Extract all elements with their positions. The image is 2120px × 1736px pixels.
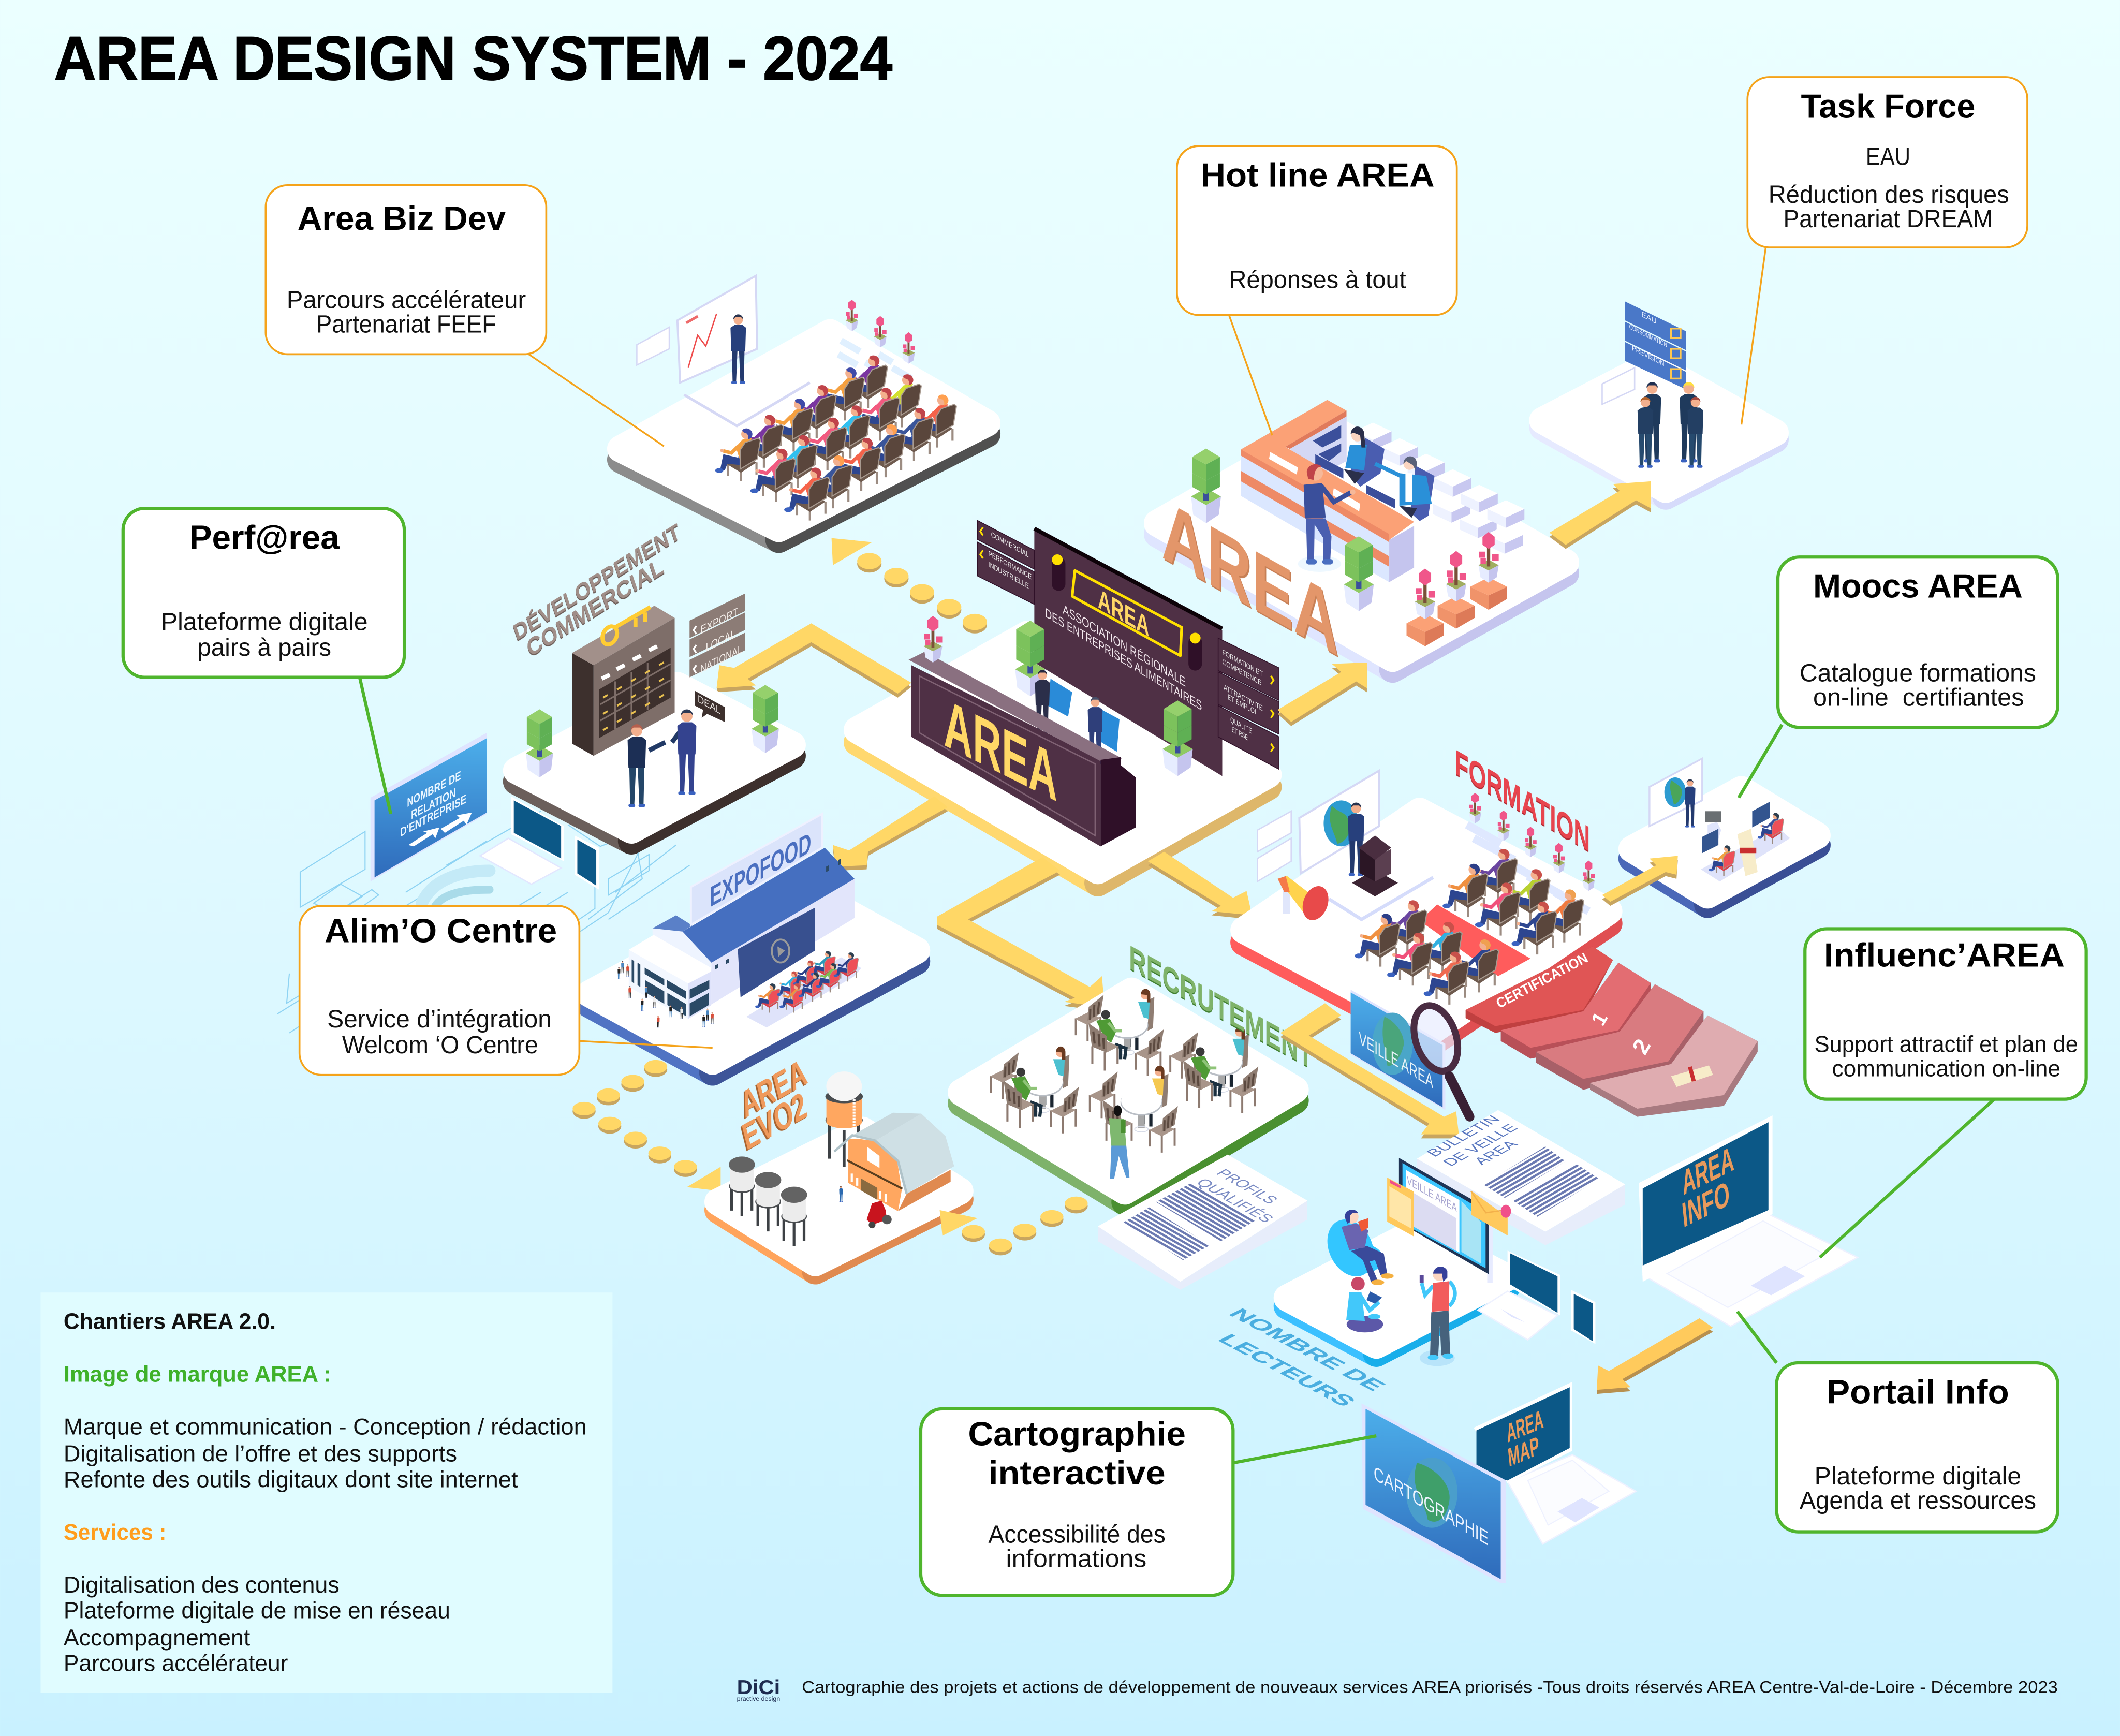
panel: chantiers area 2.0	[40, 1292, 612, 1693]
nomber de relation board: NOMBRE DE	[407, 768, 461, 810]
blue signs: EAU	[1641, 310, 1657, 326]
big area letters: AREA	[1161, 480, 1338, 674]
blue signs	[1625, 302, 1686, 389]
arrow: center to recrutement	[937, 857, 1105, 1011]
connector: hot line	[1229, 315, 1272, 435]
callout: area biz dev: Area Biz Dev	[298, 199, 506, 237]
arrow: hot line to task force	[1550, 481, 1651, 549]
back shelf with binders	[1290, 417, 1347, 476]
callout: cartographie interactive	[921, 1409, 1233, 1595]
dotted arrow to biz dev	[832, 538, 987, 634]
connector: alim'o	[580, 1041, 713, 1048]
megaphone	[1278, 876, 1333, 924]
audience seats	[715, 356, 956, 521]
laptop: area map: MAP	[1507, 1431, 1540, 1473]
callout: cartographie interactive: Accessibilité des	[989, 1520, 1166, 1548]
callout: influenc'area	[1805, 929, 2086, 1099]
table three	[1169, 1026, 1258, 1113]
callout: portail info: Plateforme digitale	[1815, 1462, 2021, 1490]
arrow: to bulletin de veille	[1280, 1003, 1459, 1138]
callout: portail info: Portail Info	[1827, 1373, 2009, 1410]
recrutement label: RECRUTEMENT	[1129, 938, 1313, 1077]
presenter	[730, 314, 746, 384]
arrow: center to dev commercial	[717, 623, 911, 698]
area evo2 label: EVO2	[739, 1084, 811, 1158]
platform: hot line area	[1157, 400, 1566, 674]
monitors	[1315, 454, 1395, 508]
callout: area biz dev: Parcours accélérateur	[287, 286, 526, 314]
callout: moocs area	[1778, 557, 2058, 727]
camera	[1705, 811, 1721, 844]
arrow: formation to moocs	[1602, 856, 1678, 906]
platform: area biz dev	[621, 276, 987, 539]
right signs	[1218, 638, 1279, 769]
arrow: portail info to cartographie	[1597, 1318, 1713, 1394]
small laptop	[1478, 1250, 1560, 1340]
platform: central area	[857, 521, 1279, 883]
laptop: area info: AREA	[1680, 1139, 1735, 1202]
board: cartographie: CARTOGRAPHIE	[1374, 1461, 1489, 1550]
callout: hot line area	[1177, 146, 1457, 315]
laptop: area map: AREA	[1505, 1404, 1544, 1448]
lecteurs scene	[1212, 1158, 1595, 1409]
expofood sign: EXPOFOOD	[710, 827, 811, 914]
export local national signs: EXPORT	[700, 605, 738, 637]
export local national signs	[689, 594, 745, 678]
developpement commercial label: DÉVELOPPEMENT	[510, 518, 683, 645]
stepped cubes	[1355, 423, 1524, 554]
speech bubble	[1602, 368, 1635, 404]
pale steps	[838, 341, 911, 378]
training screen	[1257, 771, 1379, 881]
formation audience	[1355, 849, 1584, 1005]
document: profils qualifies: QUALIFIÉS	[1192, 1176, 1277, 1225]
right signs: COMPÉTENCE	[1222, 657, 1261, 687]
building	[629, 848, 855, 1019]
callout: alim'o centre: Welcom ‘O Centre	[342, 1031, 538, 1059]
certification steps: 1	[1587, 1009, 1612, 1029]
wifi arcs	[422, 871, 490, 906]
callout: cartographie interactive: informations	[1006, 1544, 1146, 1572]
panel: chantiers area 2.0: Plateforme digitale de mise en réseau	[64, 1598, 450, 1624]
association board: ASSOCIATION RÉGIONALE	[1063, 602, 1186, 690]
plants	[526, 685, 779, 777]
connector: portail info	[1738, 1312, 1776, 1363]
envelope	[1471, 1190, 1511, 1235]
panel: chantiers area 2.0: Refonte des outils digitaux dont site internet	[64, 1467, 518, 1492]
circuit board decoration	[277, 811, 689, 1033]
callout: portail info	[1776, 1363, 2058, 1532]
left signs: INDUSTRIELLE	[989, 560, 1029, 591]
nombre de lecteurs label: LECTEURS	[1212, 1331, 1361, 1409]
callout: perf@rea: Plateforme digitale	[161, 608, 368, 636]
lectern	[1352, 835, 1398, 896]
dotted arrow from expofood to evo2	[572, 1060, 720, 1191]
monitor: VEILLE AREA	[1407, 1173, 1457, 1215]
laptop: area map	[1474, 1382, 1636, 1544]
connector: perf@rea	[360, 678, 391, 814]
callout: moocs area: Catalogue formations	[1800, 659, 2036, 687]
water tower	[826, 1071, 863, 1167]
callout: cartographie interactive: interactive	[989, 1454, 1166, 1492]
callout: task force: EAU	[1866, 143, 1910, 171]
right signs: FORMATION ET	[1222, 648, 1263, 679]
tiny farmer	[839, 1186, 843, 1202]
callout: cartographie interactive: Cartographie	[968, 1415, 1186, 1452]
logo: dici: DiCi	[737, 1676, 780, 1699]
arrow: center to formation	[1148, 852, 1252, 919]
connector: moocs	[1739, 725, 1782, 798]
callout: alim'o centre	[300, 906, 579, 1075]
callout: alim'o centre: Alim’O Centre	[325, 912, 557, 950]
callout: task force: Réduction des risques	[1769, 181, 2009, 209]
platform: area evo2	[718, 1051, 960, 1271]
standing visitor	[1298, 464, 1356, 572]
callout: perf@rea: pairs à pairs	[197, 634, 331, 661]
callout: moocs area: Moocs AREA	[1813, 567, 2023, 605]
export local national signs: NATIONAL	[700, 642, 742, 676]
footer: Cartographie des projets et actions de développement de nouveaux services AREA priorisés -Tous droits réservés AREA Centre-Val-de-Loire - Décembre 2023	[802, 1677, 2058, 1696]
document: bulletin de veille: BULLETIN	[1423, 1113, 1504, 1159]
document: profils qualifies: PROFILS	[1212, 1167, 1282, 1206]
callout: area biz dev: Partenariat FEEF	[316, 311, 496, 339]
table one	[990, 1047, 1079, 1134]
callout: perf@rea: Perf@rea	[189, 519, 340, 556]
blue signs: CONSOMMATION	[1629, 322, 1667, 349]
export local national signs: LOCAL	[706, 627, 735, 654]
tablet	[575, 835, 599, 890]
callout: alim'o centre: Service d’intégration	[327, 1005, 552, 1033]
red seats	[746, 951, 861, 1027]
nombre de lecteurs label: NOMBRE DE	[1223, 1306, 1391, 1394]
panel: chantiers area 2.0: Services :	[64, 1520, 166, 1545]
panel: chantiers area 2.0: Image de marque AREA :	[64, 1362, 331, 1387]
trainer	[1348, 802, 1364, 876]
moocs screen	[1650, 758, 1702, 826]
laptop	[480, 797, 564, 884]
connector: cartographie	[1233, 1436, 1376, 1463]
callout: influenc'area: Support attractif et plan de	[1815, 1032, 2078, 1057]
right signs: ET RSE	[1232, 725, 1248, 742]
laptop: area info: INFO	[1680, 1173, 1731, 1235]
dotted arrow from recrutement to evo2	[940, 1197, 1088, 1255]
three tanks	[729, 1156, 807, 1246]
stage	[684, 382, 810, 426]
association board: AREA	[1098, 583, 1149, 643]
panel: perf@rea digital scene	[371, 733, 599, 906]
moocs speaker	[1685, 779, 1696, 828]
formation steps and flowers	[1467, 793, 1595, 911]
left signs	[978, 521, 1034, 605]
platform: formation	[1244, 742, 1758, 1117]
sitting reader	[1346, 1277, 1383, 1332]
nomber de relation board: D'ENTREPRISE	[400, 792, 466, 840]
left signs: PERFORMANCE	[989, 549, 1032, 581]
callout: influenc'area: communication on-line	[1832, 1056, 2060, 1081]
red carpet	[1420, 905, 1530, 976]
platform: task force	[1543, 302, 1775, 496]
veille area board: VEILLE AREA	[1359, 1027, 1433, 1093]
panel: chantiers area 2.0: Parcours accélérateur	[64, 1651, 288, 1676]
callout: influenc'area: Influenc’AREA	[1824, 936, 2065, 974]
board: cartographie	[1362, 1403, 1506, 1583]
seated woman	[1344, 426, 1385, 487]
blue signs: PRÉVISION	[1632, 344, 1665, 369]
laptop: area info	[1639, 1115, 1858, 1327]
right signs: QUALITÉ	[1230, 716, 1252, 736]
area evo2 label: AREA	[737, 1051, 811, 1126]
counter flower	[923, 616, 942, 663]
standing candidate	[1109, 1105, 1129, 1179]
connector: influenc'area	[1820, 1099, 1994, 1257]
yellow document	[1387, 1178, 1414, 1237]
callout: area biz dev	[266, 185, 546, 354]
panel: chantiers area 2.0: Chantiers AREA 2.0.	[64, 1310, 276, 1334]
developpement commercial label: COMMERCIAL	[523, 552, 667, 662]
formation label: FORMATION	[1455, 742, 1590, 859]
callout: task force	[1747, 77, 2027, 247]
handshake people	[628, 709, 696, 807]
callout: moocs area: on-line certifiantes	[1813, 684, 2024, 712]
platform: recrutement	[961, 938, 1313, 1202]
mat and seats	[1701, 802, 1790, 881]
certification steps: 2	[1627, 1035, 1656, 1058]
arrow: center to expofood	[833, 797, 948, 871]
connector: biz dev	[528, 354, 664, 446]
document: bulletin de veille: AREA	[1470, 1138, 1521, 1167]
deal bubble: DEAL	[698, 693, 720, 717]
platform: expofood	[590, 814, 917, 1072]
association board	[1034, 528, 1222, 776]
plants	[1191, 448, 1374, 611]
panel: chantiers area 2.0: Digitalisation de l’offre et des supports	[64, 1441, 457, 1467]
reception counter: AREA	[944, 684, 1057, 816]
certification steps	[1466, 947, 1758, 1117]
platform: nombre de lecteurs	[1287, 1230, 1508, 1354]
document: bulletin de veille: DE VEILLE	[1439, 1122, 1521, 1168]
veille area board	[1351, 990, 1445, 1110]
panel: chantiers area 2.0: Accompagnement	[64, 1625, 251, 1651]
certification steps: CERTIFICATION	[1493, 950, 1591, 1011]
monitor	[1399, 1158, 1493, 1283]
arrow: center to hot line	[1278, 663, 1367, 726]
right signs: ET EMPLOI	[1228, 693, 1256, 716]
nomber de relation board: RELATION	[411, 785, 455, 822]
connector: task force	[1742, 247, 1766, 424]
document: bulletin de veille	[1417, 1110, 1625, 1245]
table four	[1089, 1066, 1178, 1153]
standing reader	[1420, 1267, 1455, 1366]
right signs: ATTRACTIVITÉ	[1224, 683, 1263, 713]
reception desk	[1241, 400, 1414, 582]
stage outline	[1329, 877, 1433, 919]
callout: hot line area: Hot line AREA	[1201, 156, 1435, 194]
flowers	[846, 300, 915, 364]
nomber de relation board	[371, 733, 487, 881]
seated man	[1375, 457, 1435, 521]
left signs: COMMERCIAL	[991, 531, 1029, 560]
small tablet	[1571, 1290, 1595, 1344]
title: AREA DESIGN SYSTEM - 2024	[54, 24, 892, 93]
panel: chantiers area 2.0: Digitalisation des contenus	[64, 1572, 340, 1598]
task force people	[1638, 382, 1703, 468]
receptionists	[1035, 670, 1120, 764]
key cabinet	[572, 606, 675, 756]
document: profils qualifies	[1098, 1155, 1307, 1290]
expofood sign	[691, 814, 822, 925]
platform: moocs	[1632, 758, 1817, 905]
plants	[1015, 621, 1193, 776]
callout: perf@rea	[123, 508, 404, 678]
diploma scroll	[1738, 829, 1758, 876]
logo: dici: practive design	[737, 1696, 780, 1702]
association board: DES ENTREPRISES ALIMENTAIRES	[1045, 605, 1202, 713]
table two	[1074, 989, 1164, 1076]
key	[600, 607, 651, 647]
area evo2 label	[737, 1051, 811, 1158]
panel: chantiers area 2.0: Marque et communication - Conception / rédaction	[64, 1414, 587, 1439]
callout: portail info: Agenda et ressources	[1800, 1487, 2036, 1514]
tiny crowd	[617, 961, 714, 1027]
platform: developpement commercial	[510, 518, 792, 841]
beanbag reader	[1318, 1210, 1394, 1285]
barn	[834, 1113, 954, 1211]
reception counter	[908, 652, 1136, 846]
presentation board with chart	[637, 276, 757, 382]
tractor	[866, 1201, 892, 1228]
flowers with orange bases	[1406, 532, 1507, 646]
icon: magnifier	[1406, 1000, 1469, 1117]
callout: task force: Partenariat DREAM	[1783, 205, 1993, 233]
callout: hot line area: Réponses à tout	[1229, 266, 1406, 293]
callout: task force: Task Force	[1801, 87, 1975, 125]
